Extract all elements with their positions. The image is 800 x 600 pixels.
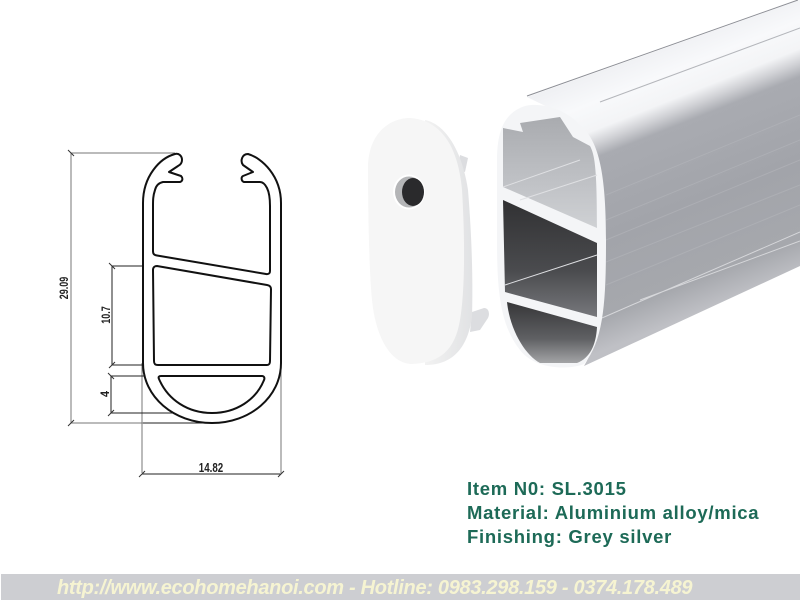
dimension label: 29.09: 29.09 — [58, 277, 71, 299]
profile middle chamber — [153, 266, 271, 365]
dimension label: 14.82: 14.82 — [199, 462, 223, 475]
open end face — [497, 105, 606, 367]
dimension label: 4: 4 — [100, 390, 112, 397]
middle chamber — [503, 200, 597, 317]
cap clip and peg — [458, 155, 489, 332]
product specifications — [467, 478, 759, 547]
cap side — [425, 120, 472, 365]
inner edge lines — [503, 160, 597, 285]
upper chamber — [503, 117, 597, 228]
dimension lines — [68, 150, 284, 477]
photo: end cap — [368, 118, 489, 365]
profile body — [527, 0, 800, 366]
technical drawing: profile cross-section — [58, 150, 284, 477]
finishing: Finishing: Grey silver — [467, 526, 672, 547]
profile outline — [143, 154, 281, 423]
photo: aluminium profile — [497, 0, 800, 367]
dimension label: 10.7: 10.7 — [100, 306, 113, 324]
item number: Item N0: SL.3015 — [467, 478, 627, 499]
body highlights and brushed lines — [527, 0, 800, 318]
material: Material: Aluminium alloy/mica — [467, 502, 759, 523]
profile bottom chamber — [159, 376, 264, 413]
cap hole — [393, 174, 425, 210]
cap face — [368, 118, 464, 364]
footer bar — [1, 574, 800, 600]
website and hotline: http://www.ecohomehanoi.com - Hotline: 0983.298.159 - 0374.178.489 — [57, 577, 693, 599]
lower chamber — [507, 302, 597, 363]
